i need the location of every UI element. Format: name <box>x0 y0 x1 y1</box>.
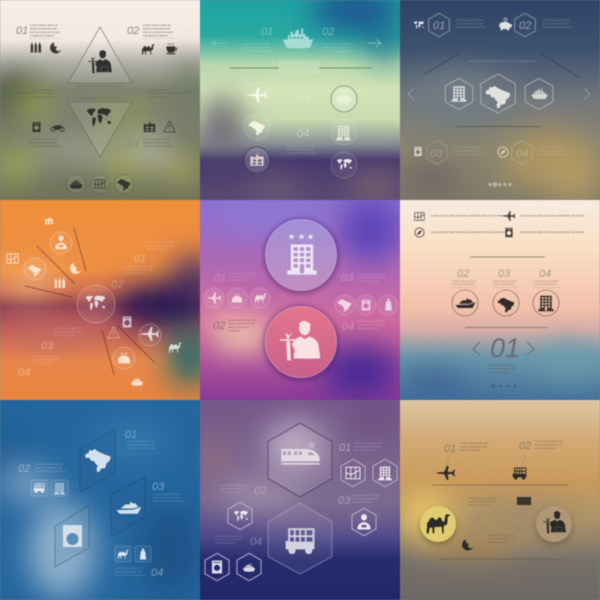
circle shadow: waiter <box>536 509 572 545</box>
heading: number 02: 02 <box>111 279 123 291</box>
icon: world <box>414 21 424 29</box>
icon: warning triangle <box>164 121 175 132</box>
text block 03: amet consectetur elit <box>54 330 81 334</box>
icon: camel <box>118 550 129 559</box>
text block 04: Lorem ipsum dolor sit <box>358 319 386 323</box>
icon: document <box>505 228 513 237</box>
icon: hotel <box>538 296 554 311</box>
text block 02: amet consectetur elit <box>323 46 350 50</box>
text block 01: sed do eiusmod tempor <box>242 49 272 53</box>
text block 04: amet consectetur elit <box>287 148 314 152</box>
icon: ship <box>131 378 143 386</box>
text block 02: Lorem ipsum dolor sit <box>35 462 63 466</box>
circle shadow: camel <box>420 509 456 545</box>
text block 04: sed do eiusmod <box>32 361 53 365</box>
text block 04: Lorem ipsum dolor sit <box>32 354 60 358</box>
arrow: right <box>367 39 381 47</box>
heading: number 03: 03 <box>498 268 511 280</box>
text block 04: sed do eiusmod <box>215 541 236 545</box>
text block 03: amet consectetur elit <box>351 496 378 500</box>
text block 03: sed do eiusmod <box>54 333 75 337</box>
icon: factory <box>45 217 53 224</box>
heading: number 03: 03 <box>338 495 351 507</box>
chevron left <box>473 342 480 355</box>
text block 01: Lorem ipsum dolor sit <box>146 240 174 244</box>
text block 01: sed do eiusmod <box>488 370 509 374</box>
icon: map <box>415 213 424 220</box>
text row 1: Lorem ipsum dolor sit amet consectetur elit sed do eiusmod <box>431 214 507 218</box>
panel: pale green blurred triangles <box>0 0 201 200</box>
icon: factory <box>250 154 264 166</box>
text block 02: sed do eiusmod tempor <box>35 469 65 473</box>
circle: waiter <box>536 506 572 542</box>
text block 03: Lorem ipsum dolor sit <box>153 492 181 496</box>
heading: number 01: 01 <box>261 26 273 38</box>
text block 01: Lorem ipsum dolor sit <box>488 363 516 367</box>
icon: hotel with stars <box>287 233 317 275</box>
heading: number 02: 02 <box>457 268 469 280</box>
text block 04: amet consectetur elit <box>115 570 142 574</box>
panel: peach sunset <box>399 199 600 400</box>
item captions: amet consectetur <box>452 282 474 286</box>
large hexagon: bus <box>268 503 332 574</box>
heading: number 01: 01 <box>134 253 146 265</box>
text block 02: sed do eiusmod <box>228 325 249 329</box>
icon: train <box>281 443 320 465</box>
icon: map <box>7 254 18 263</box>
text block 02: amet consectetur elit <box>125 268 152 272</box>
icon: factory <box>144 121 155 132</box>
text block 03: Lorem ipsum dolor sit <box>453 145 481 149</box>
text block 01: Lorem ipsum dolor sit <box>460 441 488 445</box>
icon circle outlines <box>244 82 357 178</box>
text block 04: sed do eiusmod <box>488 540 509 544</box>
icon: person <box>140 548 146 560</box>
raised circle: factory <box>244 147 270 173</box>
icon: moon <box>50 42 61 54</box>
icon: person <box>385 299 392 310</box>
icon: brazil <box>498 298 514 313</box>
text block 01: incididunt ut labore <box>30 34 55 38</box>
text block 04: amet consectetur elit <box>358 322 385 326</box>
icon: bus <box>286 528 314 554</box>
text block 02: Lorem ipsum dolor sit <box>323 42 351 46</box>
icon: moon <box>70 263 81 274</box>
heading: number 04: 04 <box>516 148 528 160</box>
text block 02: amet consectetur elit <box>35 466 62 470</box>
heading: number 02: 02 <box>519 20 531 32</box>
item circles <box>452 290 559 316</box>
hexagon left <box>445 78 473 110</box>
raised circle: piggy <box>331 86 357 112</box>
text block 01: Lorem ipsum dolor sit <box>30 23 58 27</box>
text block 01: amet consectetur elit <box>456 22 483 26</box>
text block 03: Lorem ipsum dolor sit <box>358 272 386 276</box>
icon: ship <box>243 564 255 572</box>
text block 03: amet consectetur elit <box>153 496 180 500</box>
heading: number 04: 04 <box>539 268 551 280</box>
heading: number 04: 04 <box>342 321 354 333</box>
text block 01: Lorem ipsum dolor sit <box>354 441 382 445</box>
text block 01: amet consectetur elit <box>488 366 515 370</box>
circle shadows <box>264 219 338 380</box>
icon: plane <box>436 466 455 480</box>
text block 04: Lorem ipsum dolor sit <box>115 566 143 570</box>
chevron right <box>527 342 534 355</box>
text row 2: Lorem ipsum dolor sit amet consectetur elit sed do eiusmod <box>431 230 507 234</box>
icon: camel <box>427 514 450 533</box>
text block 02: amet consectetur elit <box>542 22 569 26</box>
heading: number 04: 04 <box>18 367 30 379</box>
text row 2: Lorem ipsum dolor sit amet consectetur elit sed do <box>520 230 585 234</box>
text block 02: amet consectetur elit <box>535 442 562 446</box>
small icon circles <box>204 288 398 315</box>
icon: cup <box>166 43 177 54</box>
text block 01: amet consectetur elit <box>242 46 269 50</box>
text block 01: sed do eiusmod tempor <box>456 25 486 29</box>
heading: number 04: 04 <box>127 138 139 150</box>
chevron left <box>408 88 414 100</box>
text block 02: Lorem ipsum dolor sit <box>125 264 153 268</box>
panel: orange radial <box>0 199 201 401</box>
text block 02: sed do eiusmod tempor <box>542 25 572 29</box>
text block 01: Lorem ipsum dolor sit <box>127 439 155 443</box>
text block 02: amet consectetur elit <box>228 322 255 326</box>
icon: hotel <box>451 86 467 102</box>
icon: motorbike <box>51 125 64 131</box>
text block 04: Lorem ipsum dolor sit <box>538 145 566 149</box>
icon: plane <box>140 327 159 341</box>
icon: document <box>362 299 370 311</box>
icon: camel <box>255 293 267 303</box>
text block 04: sed do eiusmod tempor <box>287 151 317 155</box>
heading: number 04: 04 <box>297 128 309 140</box>
icon: world <box>234 511 248 521</box>
icon: piggy bank <box>499 18 512 30</box>
text block 02: incididunt ut labore <box>143 34 168 38</box>
icon: hotel <box>378 467 392 480</box>
text block 04: sed do eiusmod tempor <box>143 144 173 148</box>
panel: blue parallelograms <box>0 399 201 600</box>
icon: camel <box>169 342 182 353</box>
chevron right <box>584 88 590 100</box>
icon: globe <box>66 533 78 545</box>
icon tiles <box>31 480 151 562</box>
hexagon right <box>525 78 553 110</box>
parallelogram: yacht <box>111 477 145 537</box>
text block 01: amet consectetur elit <box>146 244 173 248</box>
icon: bus <box>34 483 45 493</box>
text block 04: amet consectetur elit <box>215 538 242 542</box>
panel: slate hexagons <box>400 0 600 200</box>
heading: number 03: 03 <box>152 481 165 493</box>
heading: number 03: 03 <box>14 138 27 150</box>
panel: mauve hexagons <box>199 400 401 600</box>
bottom icon circles <box>66 174 134 194</box>
inverted triangle frame <box>68 102 132 157</box>
text block 02: Lorem ipsum dolor sit <box>542 18 570 22</box>
icon: document <box>414 147 422 156</box>
icon: map <box>95 180 105 188</box>
icon: brazil <box>85 449 111 472</box>
text block 03: Lorem ipsum dolor sit <box>469 496 497 500</box>
text block 04: Lorem ipsum dolor sit <box>488 533 516 537</box>
icon: yacht <box>117 501 141 514</box>
text block 03: sed do eiusmod <box>351 500 372 504</box>
text block 04: amet consectetur elit <box>488 536 515 540</box>
text block 01: Lorem ipsum dolor sit <box>229 271 257 275</box>
text block 01: amet consectetur elit <box>354 444 381 448</box>
icon: ship <box>69 180 83 189</box>
large circle: waiter <box>266 306 336 378</box>
text block 04: amet consectetur elit <box>143 140 170 144</box>
icon: waiter <box>543 511 566 533</box>
icon: waiter <box>88 50 112 73</box>
icon: plane <box>502 211 515 221</box>
text block 04: sed do eiusmod tempor <box>115 573 145 577</box>
text block 02: Lorem ipsum dolor sit <box>228 318 256 322</box>
icon: map <box>346 467 360 479</box>
heading: number 02: 02 <box>127 25 139 37</box>
text block 02: sed do eiusmod tempor <box>143 30 173 34</box>
center label box <box>279 61 319 73</box>
text block 01: sed do eiusmod <box>229 278 250 282</box>
text block 01: sed do eiusmod <box>460 448 481 452</box>
text block 03: amet consectetur elit <box>453 148 480 152</box>
icon: brazil <box>249 121 265 136</box>
text block 03: Lorem ipsum dolor sit <box>30 137 58 141</box>
text block 02: sed do eiusmod <box>220 490 241 494</box>
panel: amber circles <box>400 400 600 600</box>
icon: ship <box>531 88 548 99</box>
heading: number 01: 01 <box>444 443 456 455</box>
item captions: Lorem ipsum dolor <box>493 279 517 283</box>
text block 03: sed do eiusmod <box>469 503 490 507</box>
icon: bus <box>513 468 526 480</box>
icon: hotel <box>54 483 65 494</box>
icon: bottles <box>31 42 41 53</box>
text block 02: Lorem ipsum dolor sit <box>535 439 563 443</box>
small hexagons <box>205 459 397 581</box>
heading: number 02: 02 <box>18 463 30 475</box>
item captions: amet consectetur <box>493 282 515 286</box>
caption line: Lorem ipsum dolor sit amet consectetur adipiscing elit <box>468 59 537 63</box>
icon: plane <box>206 292 221 304</box>
text row 1: Lorem ipsum dolor sit amet consectetur elit sed do <box>520 214 585 218</box>
heading: number 01: 01 <box>339 442 351 454</box>
circle: camel <box>420 506 456 542</box>
arrow: left <box>212 39 226 47</box>
icon: brazil <box>28 265 41 277</box>
icon circles <box>24 232 161 369</box>
text block 02: amet consectetur elit <box>220 486 247 490</box>
icon: bottles <box>55 278 65 288</box>
icon: world map <box>87 108 111 126</box>
icon: document <box>123 316 131 328</box>
heading: number 01: 01 <box>433 20 445 32</box>
large circle: hotel <box>266 220 336 290</box>
heading: number 01: 01 <box>214 272 226 284</box>
center circle <box>77 285 115 323</box>
heading: number 03: 03 <box>41 340 54 352</box>
text block 04: Lorem ipsum dolor sit <box>215 534 243 538</box>
large hexagon: train <box>268 423 332 497</box>
heading: number 01: 01 <box>16 25 28 37</box>
panel: purple double circles <box>200 200 400 400</box>
text block 03: Lorem ipsum dolor sit <box>54 326 82 330</box>
heading: number 02: 02 <box>254 485 266 497</box>
heading: number 02: 02 <box>213 320 225 332</box>
icon: cruise ship <box>283 28 313 49</box>
text block 01: sed do eiusmod <box>354 448 375 452</box>
text block 01: amet consectetur elit <box>127 442 154 446</box>
heading: number 03: 03 <box>430 148 443 160</box>
icon: warning triangle <box>108 327 119 338</box>
text block 04: Lorem ipsum dolor sit <box>143 137 171 141</box>
icon: camel <box>142 44 155 55</box>
heading: number 04: 04 <box>151 567 163 579</box>
text block 01: amet consectetur elit <box>30 26 57 30</box>
heading: number 04: 04 <box>250 536 262 548</box>
heading: number 04: 04 <box>510 522 522 534</box>
icon: world <box>85 296 105 310</box>
icon: document <box>212 561 222 573</box>
hexagon center <box>481 74 515 113</box>
pagination dots <box>491 384 516 388</box>
item captions: Lorem ipsum dolor <box>534 279 558 283</box>
parallelogram: document <box>55 506 89 567</box>
icon: waiter <box>280 321 320 360</box>
text block 02: incididunt <box>228 328 240 332</box>
text block 02: sed do eiusmod tempor <box>323 49 353 53</box>
text block 01: sed do eiusmod <box>146 247 167 251</box>
text block 03: amet consectetur elit <box>469 500 496 504</box>
icon: hotel <box>336 126 351 140</box>
text block 04: amet consectetur elit <box>538 148 565 152</box>
icon: fort <box>118 352 130 363</box>
text block 01: amet consectetur elit <box>460 444 487 448</box>
pagination dots <box>488 182 512 187</box>
hexagon 02 <box>515 13 535 37</box>
heading: number 02: 02 <box>322 26 334 38</box>
text block 04: Lorem ipsum dolor sit <box>287 144 315 148</box>
text block 02: sed do eiusmod <box>125 271 146 275</box>
text block 03: sed do eiusmod tempor <box>453 152 483 156</box>
icon: moon <box>462 539 473 551</box>
icon: world <box>337 159 352 170</box>
text block 02: Lorem ipsum dolor sit <box>143 23 171 27</box>
hexagon 04 <box>512 141 532 164</box>
text block 01: sed do eiusmod tempor <box>127 446 157 450</box>
icon: brazil <box>486 86 510 108</box>
heading: number 02: 02 <box>519 440 531 452</box>
leader lines <box>446 455 525 537</box>
text block 03: amet consectetur elit <box>358 276 385 280</box>
icon: waiter <box>358 514 370 530</box>
text block 03: amet consectetur elit <box>30 140 57 144</box>
triangle frame <box>68 27 132 83</box>
heading: number 03: 03 <box>468 513 481 525</box>
icon: brazil <box>118 179 130 191</box>
icon: brazil <box>338 299 351 312</box>
text block 03: sed do eiusmod <box>358 279 379 283</box>
text block 02: sed do eiusmod <box>535 446 556 450</box>
icon: plane <box>246 87 267 103</box>
item captions: amet consectetur <box>534 282 556 286</box>
text block 03: sed do eiusmod tempor <box>153 499 183 503</box>
hexagon 01 <box>429 13 449 37</box>
icon: compass <box>415 228 424 237</box>
text block 04: sed do eiusmod tempor <box>538 152 568 156</box>
text block 02: amet consectetur elit <box>143 26 170 30</box>
icon: fort <box>232 293 242 303</box>
text block 04: amet consectetur elit <box>32 358 59 362</box>
heading: number 03: 03 <box>341 272 354 284</box>
text block 02: Lorem ipsum dolor sit <box>220 483 248 487</box>
parallelogram: brazil <box>80 429 115 492</box>
item captions: Lorem ipsum dolor <box>452 279 476 283</box>
icon: yacht <box>455 298 476 308</box>
icon: waiter <box>55 235 67 249</box>
icon: document tile <box>63 525 82 547</box>
panel: teal hero ship <box>199 0 401 200</box>
text block 03: Lorem ipsum dolor sit <box>351 493 379 497</box>
heading: number 01: 01 <box>125 429 137 441</box>
text block 03: sed do eiusmod tempor <box>30 144 60 148</box>
icon: label tag <box>517 497 531 505</box>
heading: number 01: 01 <box>490 333 520 363</box>
text block 01: Lorem ipsum dolor sit <box>456 18 484 22</box>
hexagon 03 <box>427 141 447 164</box>
icon: document <box>33 122 40 132</box>
icon: piggy bank <box>336 90 352 105</box>
text block 01: sed do eiusmod tempor <box>30 30 60 34</box>
text block 04: sed do eiusmod <box>358 326 379 330</box>
text block 01: Lorem ipsum dolor sit <box>242 42 270 46</box>
icon: compass <box>498 147 508 157</box>
text block 01: amet consectetur elit <box>229 274 256 278</box>
heading: number 03: 03 <box>298 92 311 104</box>
